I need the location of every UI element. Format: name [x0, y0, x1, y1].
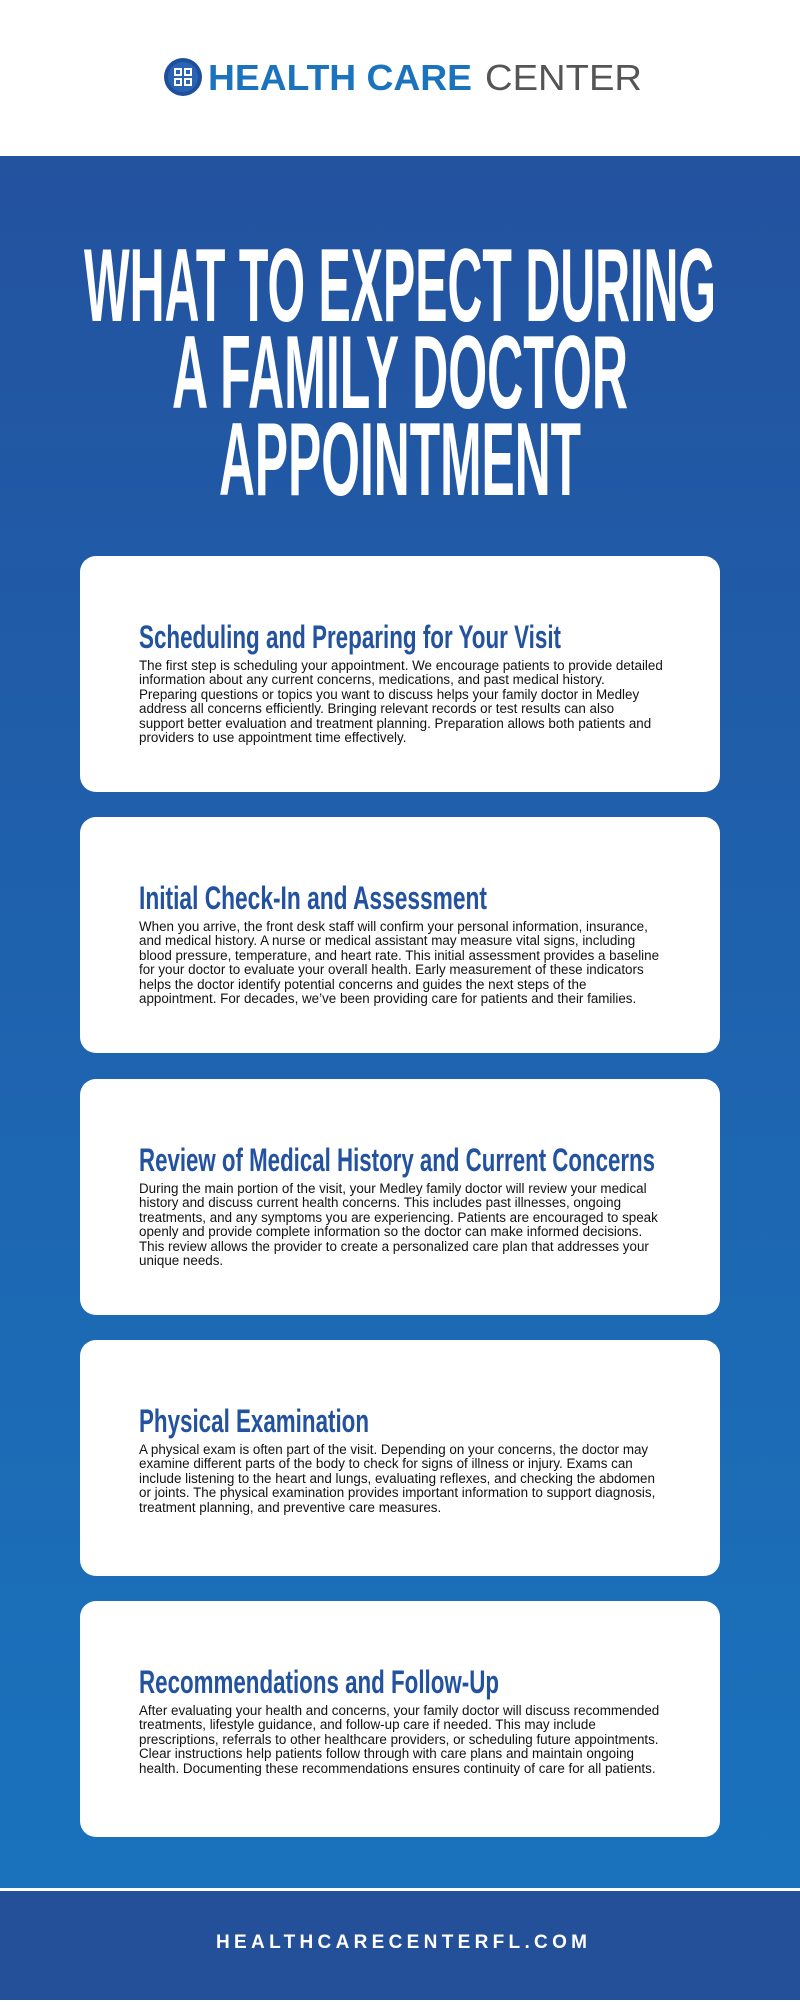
- panel: check-in: When you arrive, the front desk staff will confirm your personal information, insurance,: [139, 919, 648, 934]
- title: [84, 230, 716, 500]
- panel: physical exam: treatment planning, and preventive care measures.: [139, 1500, 441, 1515]
- header logo: [0, 0, 800, 156]
- panel: medical history: history and discuss current health concerns. This includes past illnesses, ongoing: [139, 1195, 621, 1210]
- panel: scheduling: support better evaluation and treatment planning. Preparation allows both patients and: [139, 716, 651, 731]
- panel: medical history: This review allows the provider to create a personalized care plan that addresses your: [139, 1239, 649, 1254]
- panel: physical exam: examine different parts of the body to check for signs of illness or injury. Exams can: [139, 1456, 633, 1471]
- panel: check-in: for your doctor to evaluate your overall health. Early measurement of these indicators: [139, 962, 644, 977]
- logo text: CENTER: [485, 57, 642, 98]
- panel: check-in: Initial Check-In and Assessment: [139, 880, 487, 916]
- panel: physical exam: Physical Examination: [139, 1403, 369, 1439]
- logo text: [208, 57, 642, 98]
- panel: medical history: openly and provide complete information so the doctor can make informed decisions.: [139, 1224, 642, 1239]
- panel: scheduling: providers to use appointment time effectively.: [139, 730, 406, 745]
- panel: scheduling: [80, 556, 720, 792]
- panel: medical history: [80, 1079, 720, 1315]
- panel: medical history: unique needs.: [139, 1253, 223, 1268]
- panel: recommendations: [80, 1601, 720, 1837]
- icon: logo circle: [164, 58, 202, 96]
- panel: physical exam: include listening to the heart and lungs, evaluating reflexes, and checking the abdomen: [139, 1471, 655, 1486]
- panel: physical exam: or joints. The physical examination provides important information to support diagnosis,: [139, 1485, 655, 1500]
- panel: check-in: [80, 817, 720, 1053]
- panel: check-in: blood pressure, temperature, and heart rate. This initial assessment provides a baseline: [139, 948, 659, 963]
- panel: recommendations: Clear instructions help patients follow through with care plans and maintain ongoing: [139, 1746, 634, 1761]
- panel: scheduling: address all concerns efficiently. Bringing relevant records or test results can also: [139, 701, 614, 716]
- panel: check-in: appointment. For decades, we’ve been providing care for patients and their families.: [139, 991, 636, 1006]
- footer: [0, 1891, 800, 2000]
- panel: physical exam: [80, 1340, 720, 1576]
- panel: physical exam: A physical exam is often part of the visit. Depending on your concerns, the doctor may: [139, 1442, 648, 1457]
- panel: check-in: and medical history. A nurse or medical assistant may measure vital signs, including: [139, 933, 635, 948]
- logo text: HEALTH CARE: [208, 57, 472, 98]
- panel: recommendations: health. Documenting these recommendations ensures continuity of care for all patients.: [139, 1761, 656, 1776]
- panel: recommendations: treatments, lifestyle guidance, and follow-up care if needed. This may include: [139, 1717, 596, 1732]
- panel: scheduling: Preparing questions or topics you want to discuss helps your family doctor in Medley: [139, 687, 639, 702]
- panel: check-in: helps the doctor identify potential concerns and guides the next steps of the: [139, 977, 586, 992]
- footer: HEALTHCARECENTERFL.COM: [216, 1932, 587, 1953]
- panel: scheduling: The first step is scheduling your appointment. We encourage patients to provide detailed: [139, 658, 663, 673]
- panel: recommendations: After evaluating your health and concerns, your family doctor will discuss recommended: [139, 1703, 659, 1718]
- panel: medical history: During the main portion of the visit, your Medley family doctor will review your medical: [139, 1181, 647, 1196]
- panel: medical history: treatments, and any symptoms you are experiencing. Patients are encouraged to speak: [139, 1210, 658, 1225]
- panel: recommendations: prescriptions, referrals to other healthcare providers, or scheduling future appointments.: [139, 1732, 659, 1747]
- panel: scheduling: information about any current concerns, medications, and past medical history.: [139, 672, 605, 687]
- panel: recommendations: Recommendations and Follow-Up: [139, 1664, 499, 1700]
